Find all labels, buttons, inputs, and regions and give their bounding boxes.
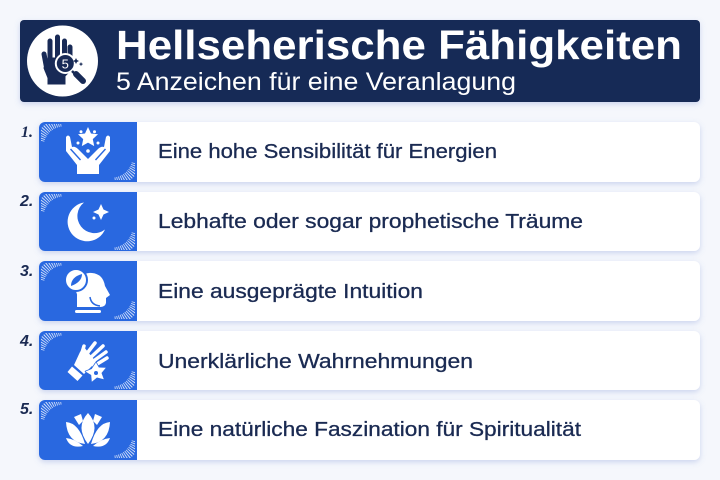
row 2: Träume: [19, 192, 700, 252]
label: Unerklärliche Wahrnehmungen: [158, 351, 473, 373]
number 4: 4.: [19, 333, 33, 350]
icon: moon and star: [68, 202, 109, 241]
number 5: 5.: [20, 401, 33, 418]
label: Eine hohe Sensibilität für Energien: [158, 141, 497, 163]
title: Hellseherische Fähigkeiten: [116, 22, 682, 68]
row 4: Wahrnehmungen: [19, 331, 700, 391]
number 1: 1.: [21, 124, 33, 141]
row 5: Spiritualität: [20, 400, 700, 460]
label: Eine natürliche Faszination für Spiritualität: [158, 419, 581, 441]
subtitle: 5 Anzeichen für eine Veranlagung: [116, 68, 516, 96]
header banner: [20, 20, 700, 102]
icon: hand with magnifier: [27, 26, 98, 96]
number 2: 2.: [19, 193, 33, 210]
row 1: Sensibilität: [21, 122, 700, 182]
label: Eine ausgeprägte Intuition: [158, 281, 423, 303]
number 3: 3.: [20, 263, 33, 280]
icon: hand with flower: [68, 343, 107, 382]
icon: lotus: [66, 413, 110, 447]
icon: head with compass: [65, 269, 110, 313]
label: Lebhafte oder sogar prophetische Träume: [158, 211, 583, 233]
icon: hands with star: [66, 127, 110, 174]
row 3: Intuition: [20, 261, 700, 321]
icon: hand with magnifier: 5: [62, 56, 69, 71]
